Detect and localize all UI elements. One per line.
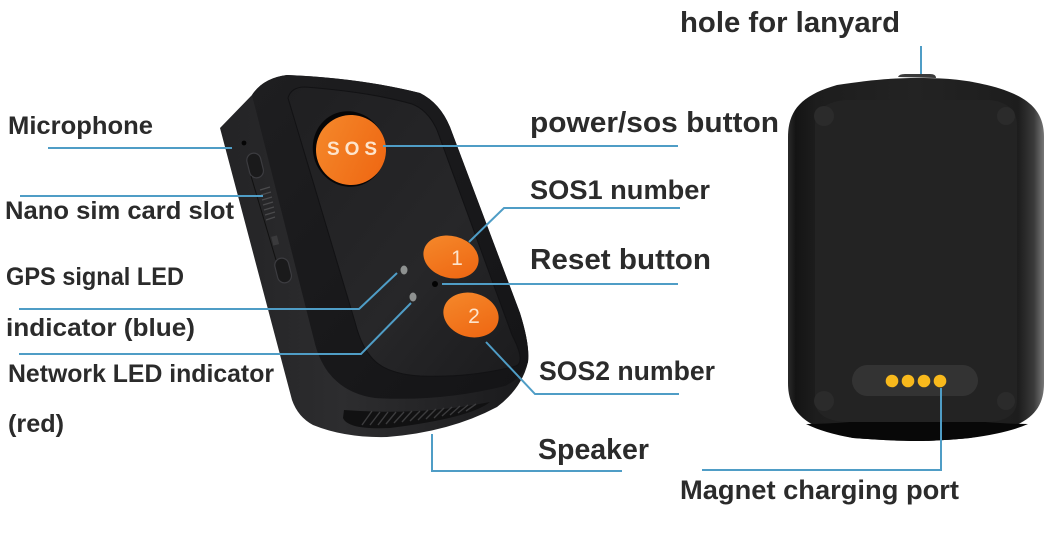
label: GPS signal LED: GPS signal LED [6, 263, 184, 291]
LED indicators and reset hole [400, 266, 438, 302]
label: Network LED indicator: Network LED indicator [8, 360, 274, 388]
lanyard tab [898, 74, 936, 78]
button 1 [419, 229, 483, 285]
label: (red): (red) [8, 410, 64, 438]
device body [220, 75, 528, 437]
label: power/sos button: power/sos button [530, 107, 779, 139]
label: Nano sim card slot: Nano sim card slot [5, 197, 235, 225]
label: hole for lanyard: hole for lanyard [680, 7, 900, 39]
back body [788, 78, 1044, 441]
label: Magnet charging port: Magnet charging port [680, 475, 959, 505]
front view of device [220, 75, 528, 437]
magnet charging port [852, 365, 978, 396]
speaker grille [343, 402, 490, 428]
side ports [242, 141, 293, 284]
leader lines [19, 46, 941, 471]
label: SOS1 number: SOS1 number [530, 175, 710, 205]
button 2: 2 [468, 305, 480, 328]
SOS button: SOS [327, 139, 377, 160]
inset panel [288, 87, 520, 376]
label: indicator (blue): indicator (blue) [6, 314, 195, 342]
button 1: 1 [451, 247, 463, 270]
label: Reset button: Reset button [530, 244, 711, 276]
back view of device [788, 74, 1044, 441]
label: Speaker: Speaker [538, 434, 649, 466]
label: Microphone: Microphone [8, 112, 153, 140]
button 2 [438, 287, 504, 343]
corner screws [814, 106, 1015, 411]
device face [252, 75, 528, 399]
SOS button [302, 101, 396, 197]
label: SOS2 number: SOS2 number [539, 356, 715, 386]
bottom shadow [806, 422, 1028, 441]
microphone hole [242, 141, 246, 145]
back panel [815, 100, 1017, 422]
